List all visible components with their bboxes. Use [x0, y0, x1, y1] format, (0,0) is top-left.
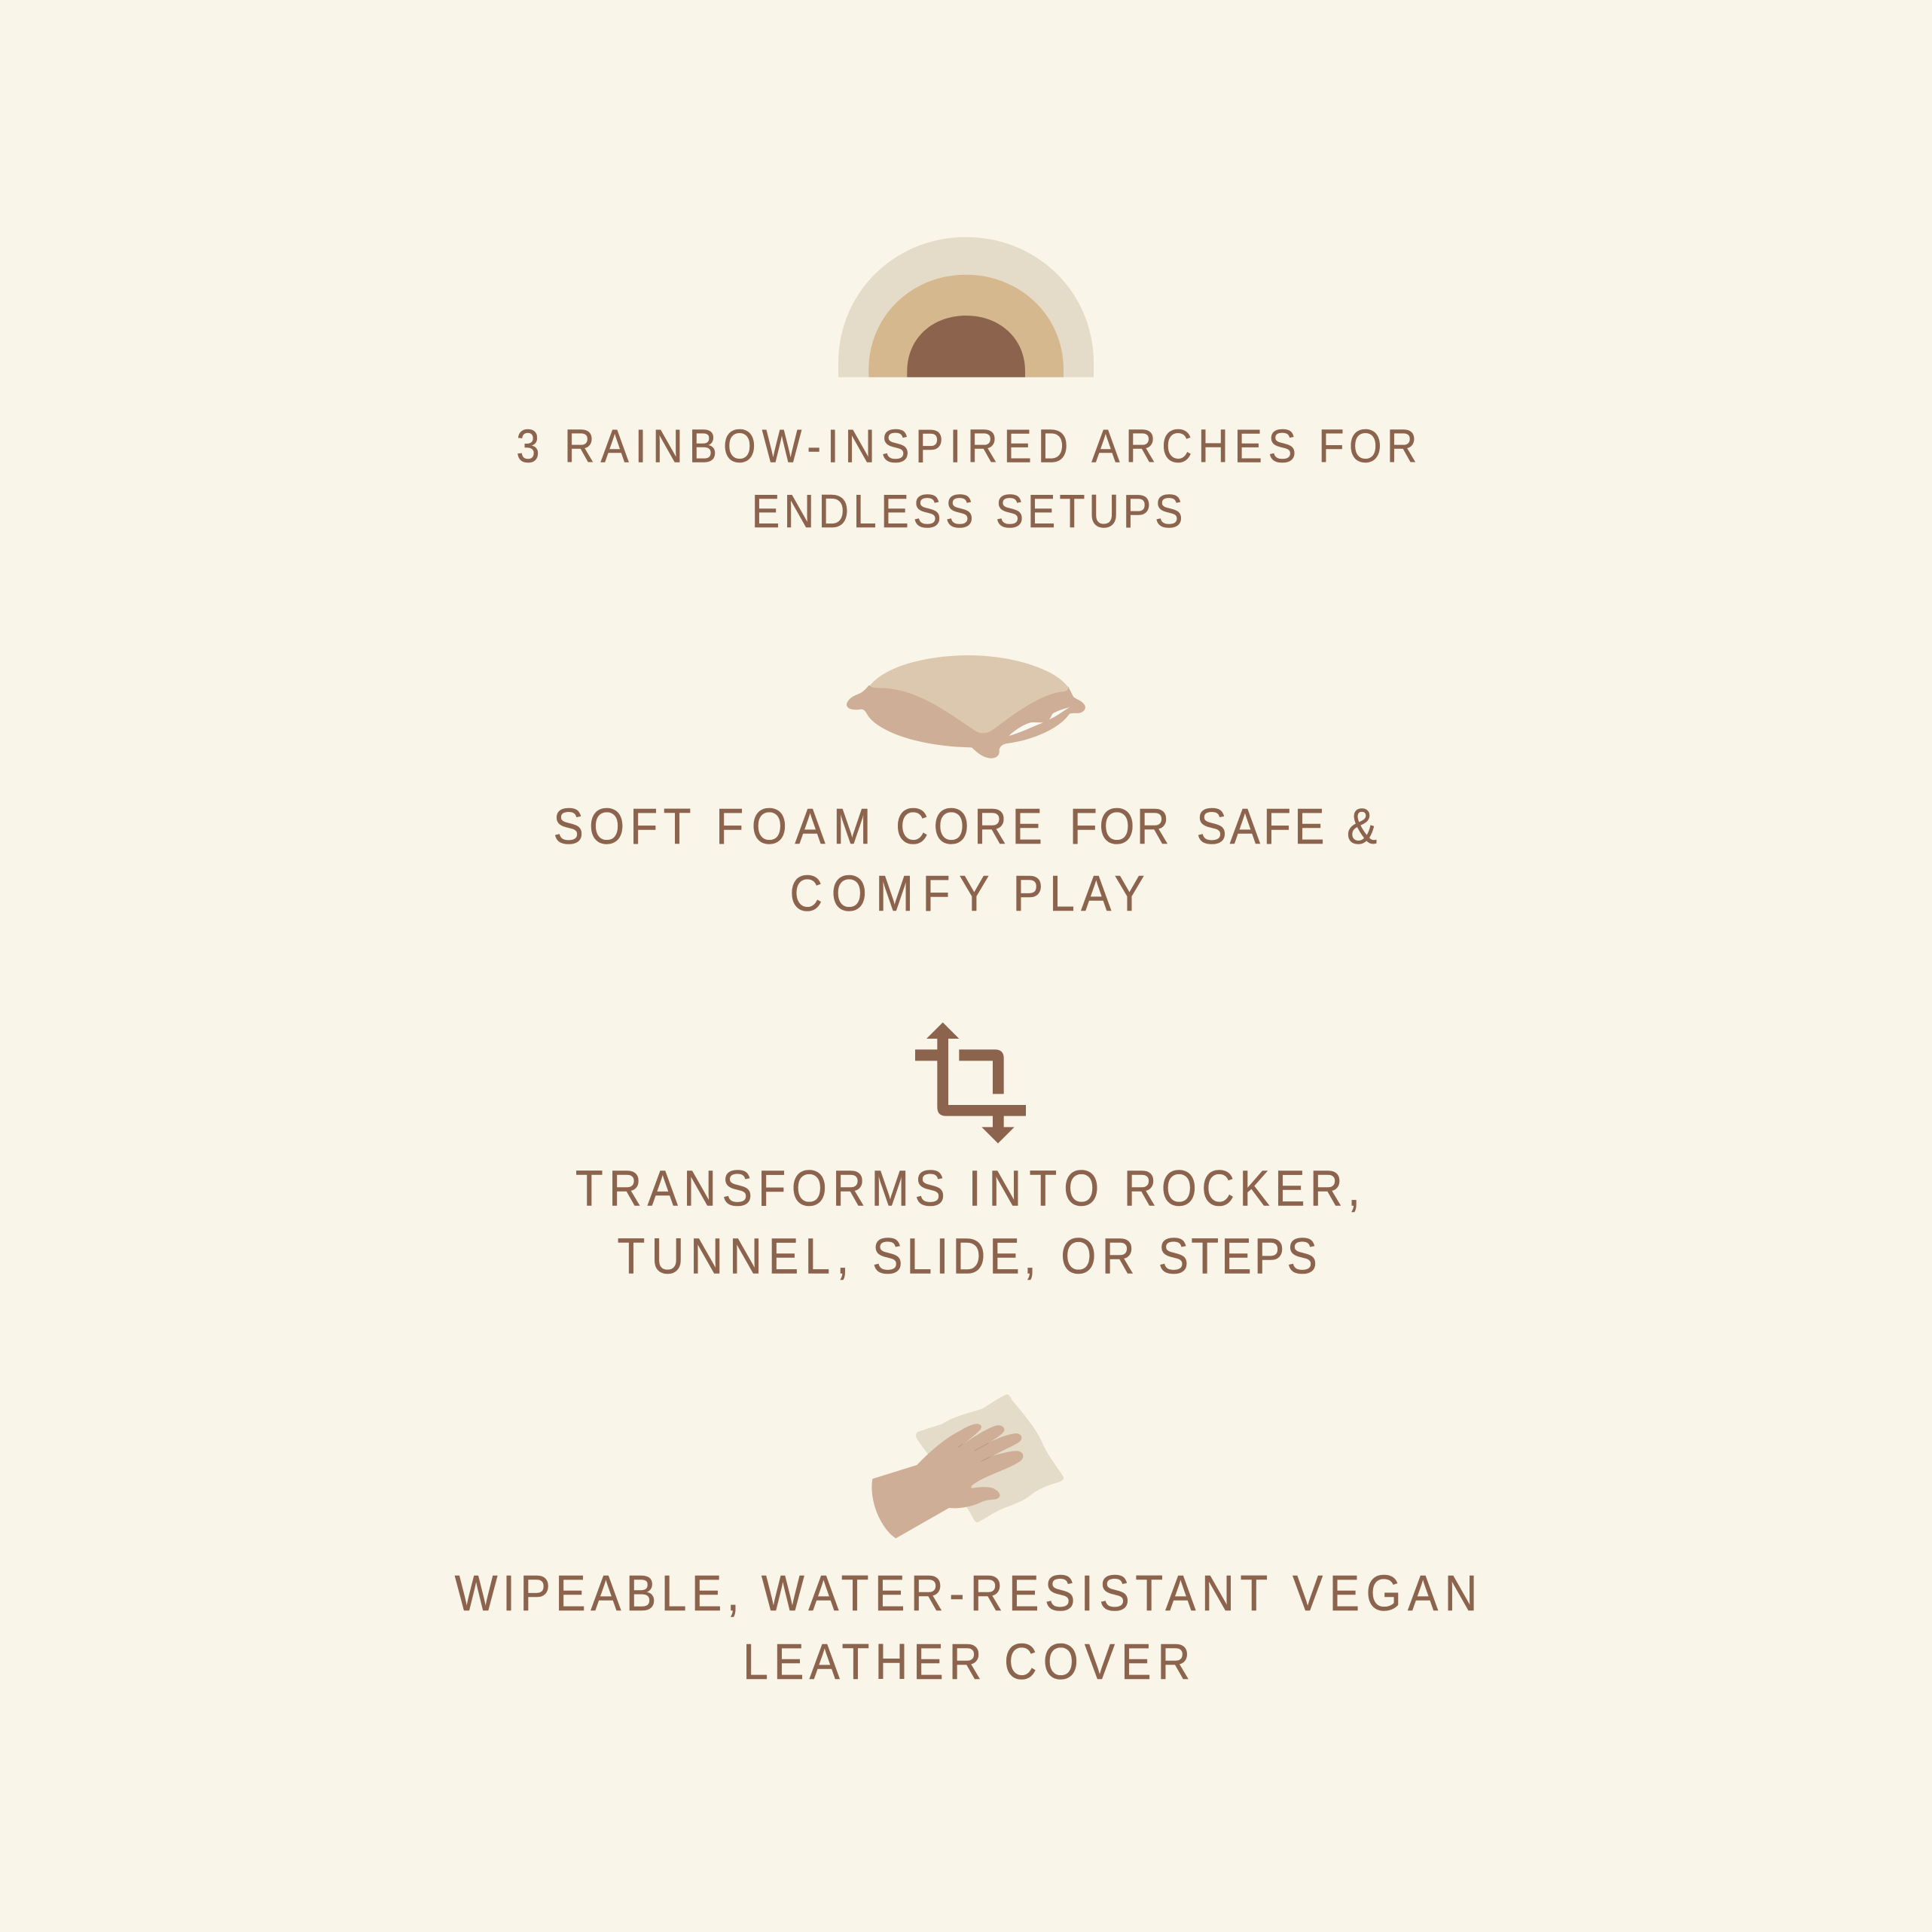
text: wipeable caption: VEGAN	[1293, 1564, 1477, 1622]
feature 4: wipeable cover	[455, 1394, 1477, 1690]
text: wipeable caption: LEATHER	[743, 1633, 981, 1690]
text: rainbow arches caption: ARCHES	[1091, 421, 1296, 472]
text: soft foam caption: FOR	[1070, 798, 1169, 855]
text: soft foam caption: COMFY	[790, 865, 989, 922]
text: wipeable caption: COVER	[1004, 1633, 1190, 1690]
icon: foam cushion	[847, 655, 1085, 758]
text: transforms caption: SLIDE,	[872, 1228, 1036, 1284]
text: transforms caption: OR	[1061, 1228, 1134, 1284]
text: soft foam caption: CORE	[896, 798, 1042, 855]
text: rainbow arches caption: RAINBOW-INSPIRED	[564, 421, 1068, 472]
text: soft foam caption: SOFT	[553, 798, 691, 855]
text: rainbow arches caption: SETUPS	[996, 486, 1183, 538]
text: wipeable caption: WIPEABLE,	[455, 1564, 740, 1622]
feature 3: transforms	[575, 1022, 1360, 1284]
text: soft foam caption: &	[1347, 798, 1377, 855]
feature 1: rainbow arches	[516, 237, 1417, 538]
text: soft foam caption: SAFE	[1196, 798, 1324, 855]
text: transforms caption: STEPS	[1158, 1228, 1317, 1284]
icon: transform arrows	[915, 1022, 1026, 1143]
text: rainbow arches caption: ENDLESS	[752, 486, 973, 538]
text: transforms caption: TRANSFORMS	[575, 1160, 945, 1216]
text: soft foam caption: FOAM	[716, 798, 871, 855]
text: transforms caption: TUNNEL,	[618, 1228, 849, 1284]
text: transforms caption	[575, 1160, 1360, 1284]
text: rainbow arches caption	[516, 421, 1417, 538]
feature 2: soft foam	[553, 655, 1377, 922]
text: rainbow arches caption: FOR	[1318, 421, 1417, 472]
text: wipeable caption: WATER-RESISTANT	[762, 1564, 1268, 1622]
icon: rainbow arch	[838, 237, 1094, 377]
text: wipeable caption	[455, 1564, 1477, 1690]
text: transforms caption: INTO	[969, 1160, 1099, 1216]
text: soft foam caption	[553, 798, 1377, 922]
text: soft foam caption: PLAY	[1013, 865, 1145, 922]
text: transforms caption: ROCKER,	[1124, 1160, 1360, 1216]
icon: hand wiping with cloth	[871, 1394, 1064, 1538]
text: rainbow arches caption: 3	[516, 421, 539, 472]
